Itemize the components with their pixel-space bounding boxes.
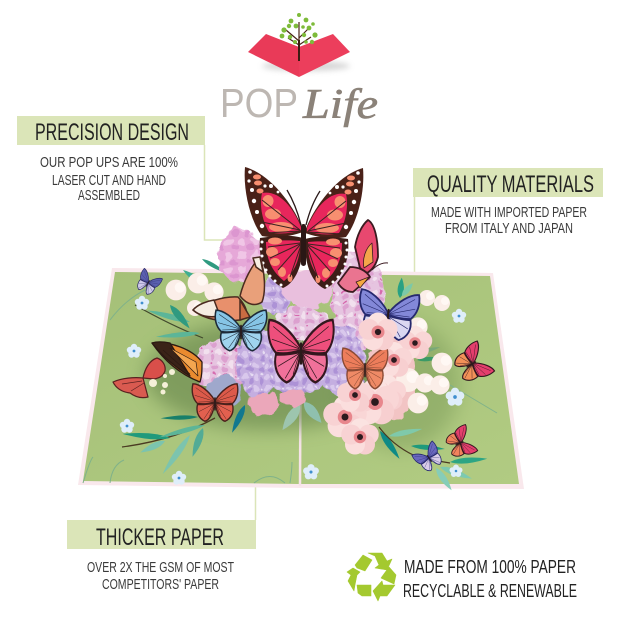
panel: recycling note bbox=[347, 553, 577, 601]
connector: quality materials bbox=[414, 197, 416, 274]
butterfly: blue purple right bbox=[356, 289, 420, 342]
text: quality materials body: FROM ITALY AND JAPAN bbox=[445, 220, 573, 237]
heading: thicker paper bbox=[67, 520, 256, 551]
text: thicker paper body: OVER 2X THE GSM OF MOST bbox=[87, 559, 234, 576]
connector: precision design bbox=[204, 145, 232, 240]
text: precision design body: ASSEMBLED bbox=[78, 187, 140, 204]
butterfly: coral right bbox=[342, 348, 388, 389]
panel: quality materials bbox=[413, 168, 603, 237]
icon: red open book with tree bbox=[248, 13, 350, 77]
butterfly: pink card right bbox=[450, 341, 495, 387]
butterflies: small group bbox=[113, 220, 495, 475]
flowers: hydrangeas and blossoms bbox=[166, 228, 452, 454]
connector: thicker paper bbox=[254, 487, 256, 520]
card base bbox=[78, 268, 524, 489]
heading: precision design: PRECISION DESIGN bbox=[35, 119, 189, 146]
logo bbox=[220, 13, 378, 128]
heading: thicker paper: THICKER PAPER bbox=[96, 524, 224, 551]
panel: thicker paper bbox=[67, 520, 256, 593]
butterfly: large red monarch bbox=[245, 167, 363, 289]
butterfly: orange monarch bbox=[152, 342, 202, 382]
butterfly: pink top right bbox=[338, 220, 388, 292]
text: precision design body: LASER CUT AND HAND bbox=[52, 172, 166, 189]
butterfly: red bottom bbox=[192, 384, 238, 421]
wordmark: Life: Life bbox=[302, 82, 378, 128]
butterfly: blue purple top left bbox=[133, 268, 163, 297]
white blossoms by red butterfly bbox=[149, 369, 175, 394]
pop-up card illustration bbox=[78, 167, 524, 492]
panel: precision design bbox=[17, 116, 205, 204]
butterfly: sky blue bbox=[215, 310, 267, 351]
wordmark: POP: POP bbox=[220, 80, 298, 126]
heading: precision design bbox=[17, 116, 205, 146]
butterfly: purple card lower right bbox=[412, 441, 446, 475]
text: precision design body: OUR POP UPS ARE 100% bbox=[40, 154, 178, 171]
butterfly: pink centre bbox=[268, 320, 334, 382]
butterfly: red left bbox=[113, 358, 165, 398]
text: thicker paper body bbox=[87, 559, 234, 593]
text: precision design body bbox=[40, 154, 178, 204]
text: recycling note bbox=[403, 557, 577, 601]
butterfly: pink card lower right bbox=[443, 424, 478, 462]
text: thicker paper body: COMPETITORS' PAPER bbox=[102, 576, 219, 593]
printed foliage on card bbox=[83, 257, 497, 492]
icon: recycle arrows bbox=[347, 553, 396, 601]
text: quality materials body bbox=[431, 204, 587, 237]
butterfly: peach large bbox=[193, 257, 264, 321]
